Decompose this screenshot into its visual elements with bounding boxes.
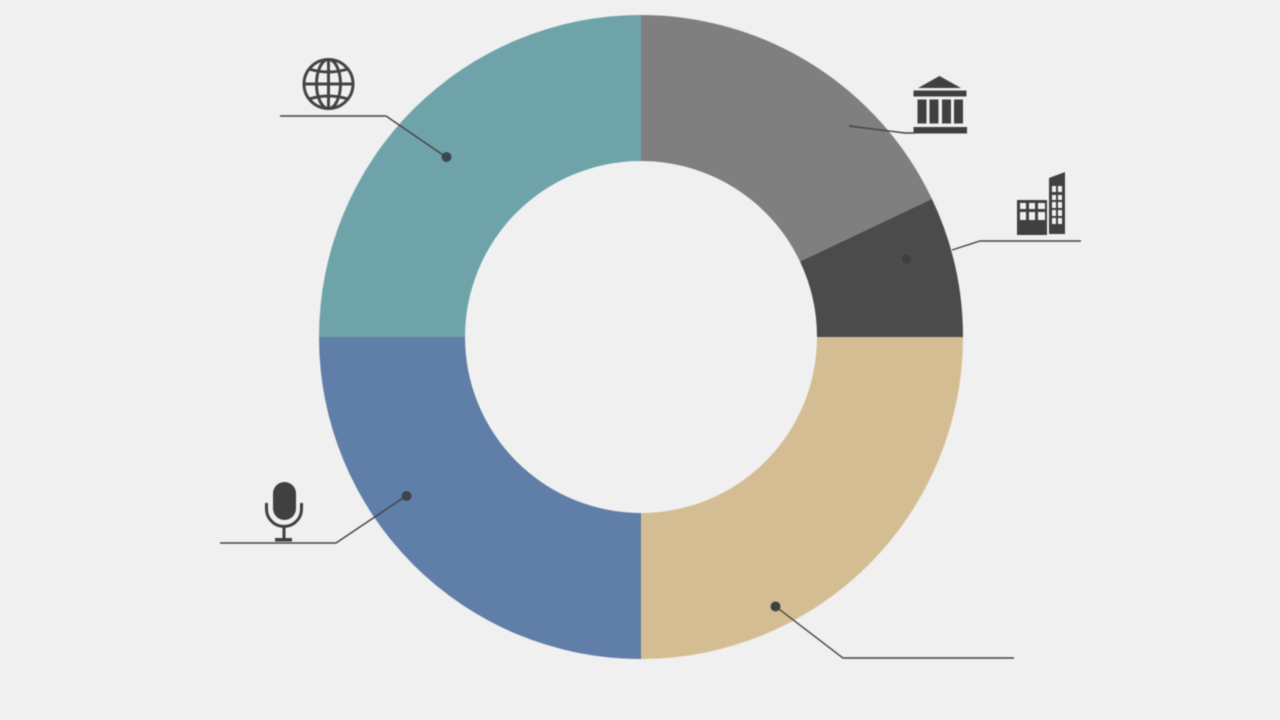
icon: office buildings [1017,172,1065,235]
callout: bank leader line [849,126,915,133]
callout: microphone leader line [220,491,412,543]
callout: office leader line [902,241,1081,264]
icon: globe [304,60,353,108]
segment: tan bottom-right [641,337,963,659]
callout: tan segment leader line [770,602,1014,658]
donut chart [319,15,963,659]
icon: bank building [914,76,967,134]
segment: dark gray right [800,199,963,337]
segment: blue bottom-left [319,337,641,659]
segment: gray top-right [641,15,932,261]
callout: globe leader line [280,116,452,162]
segment: teal top-left [319,15,641,337]
icon: microphone [266,482,302,542]
